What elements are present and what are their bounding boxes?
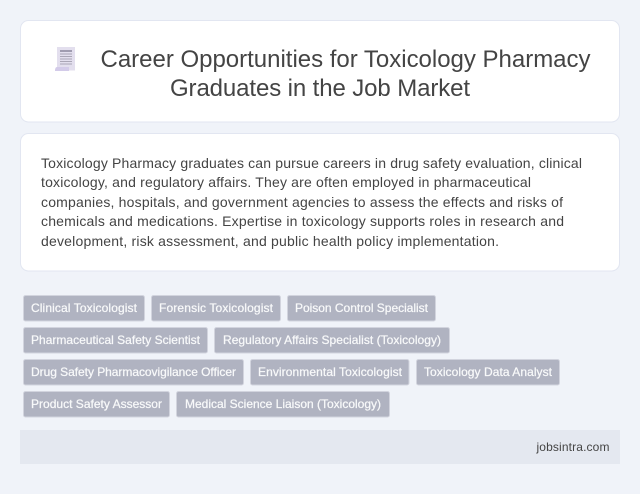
tag: Regulatory Affairs Specialist (Toxicology): Regulatory Affairs Specialist (Toxicology) bbox=[223, 333, 441, 347]
tag: Product Safety Assessor bbox=[24, 392, 170, 417]
title: Career Opportunities for Toxicology Pharmacy bbox=[100, 46, 590, 73]
tag: Toxicology Data Analyst bbox=[416, 360, 560, 385]
tag: Toxicology Data Analyst: Toxicology Data Analyst bbox=[424, 365, 553, 379]
tag: Regulatory Affairs Specialist (Toxicology) bbox=[214, 328, 450, 353]
tag: Pharmaceutical Safety Scientist: Pharmaceutical Safety Scientist bbox=[31, 333, 201, 347]
panel: description bbox=[20, 134, 620, 271]
tag: Environmental Toxicologist: Environmental Toxicologist bbox=[258, 365, 403, 379]
tag: Poison Control Specialist: Poison Control Specialist bbox=[295, 301, 429, 315]
description text: toxicology, and regulatory affairs. They are often employed in pharmaceutical bbox=[41, 174, 531, 190]
tag: Product Safety Assessor: Product Safety Assessor bbox=[31, 397, 162, 411]
tag: Pharmaceutical Safety Scientist bbox=[24, 328, 208, 353]
tag: Drug Safety Pharmacovigilance Officer: Drug Safety Pharmacovigilance Officer bbox=[31, 365, 236, 379]
tag: Drug Safety Pharmacovigilance Officer bbox=[24, 360, 244, 385]
panel: header bbox=[20, 20, 620, 122]
description text bbox=[41, 155, 582, 249]
description text: chemicals and medications. Expertise in toxicology supports roles in research and bbox=[41, 213, 564, 229]
tag list bbox=[24, 296, 560, 417]
icon: document scroll bbox=[55, 47, 75, 71]
tag: Forensic Toxicologist bbox=[152, 296, 280, 321]
description text: development, risk assessment, and public health policy implementation. bbox=[41, 233, 499, 249]
tag: Forensic Toxicologist: Forensic Toxicologist bbox=[159, 301, 274, 315]
description text: Toxicology Pharmacy graduates can pursue careers in drug safety evaluation, clinical bbox=[41, 155, 582, 171]
tag: Clinical Toxicologist: Clinical Toxicologist bbox=[31, 301, 138, 315]
tag: Poison Control Specialist bbox=[288, 296, 436, 321]
tag: Clinical Toxicologist bbox=[24, 296, 144, 321]
tag: Medical Science Liaison (Toxicology): Medical Science Liaison (Toxicology) bbox=[185, 397, 381, 411]
title bbox=[100, 46, 590, 102]
description text: companies, hospitals, and government agencies to assess the effects and risks of bbox=[41, 194, 563, 210]
footer text: jobsintra.com: jobsintra.com bbox=[536, 440, 610, 454]
title: Graduates in the Job Market bbox=[170, 75, 470, 102]
tag: Medical Science Liaison (Toxicology) bbox=[176, 392, 390, 417]
footer bbox=[20, 430, 620, 464]
tag: Environmental Toxicologist bbox=[250, 360, 409, 385]
